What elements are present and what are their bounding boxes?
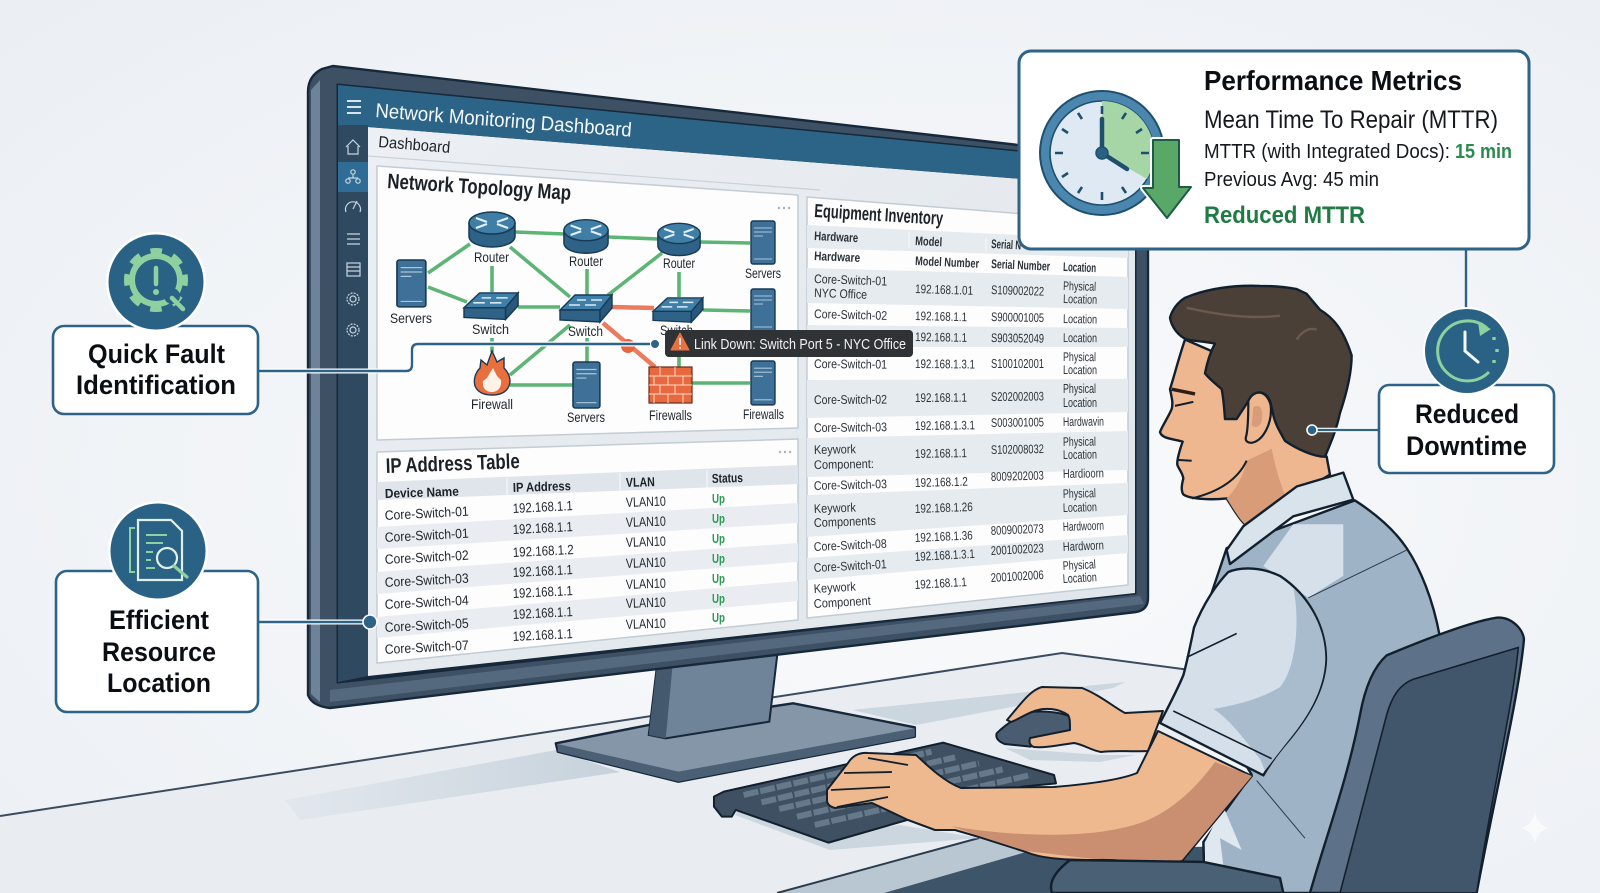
man: sleeve, head and chair <box>1051 286 1524 893</box>
device labels: Switch <box>660 322 693 338</box>
inventory column 1: Core-Switch-02 <box>814 393 887 407</box>
inventory column 4: Location <box>1063 260 1096 275</box>
inventory column 3: S202002003 <box>991 389 1044 404</box>
status column <box>712 492 725 625</box>
inventory column 4: Hardioorn <box>1063 466 1104 481</box>
inventory column 1: Keywork <box>813 580 857 596</box>
inventory column 3: S003001005 <box>991 415 1044 430</box>
inventory column 3: Serial Number <box>991 257 1051 274</box>
dashboard title: Network Monitoring Dashboard <box>375 100 633 142</box>
inventory column 4: Physical <box>1063 279 1096 294</box>
vlan column: VLAN10 <box>626 616 666 632</box>
inventory column 4: Physical <box>1063 350 1096 364</box>
green links <box>428 232 750 385</box>
forearm shading <box>951 762 1252 862</box>
inventory column 4: Location <box>1063 396 1097 410</box>
column headers <box>385 470 743 501</box>
inventory zebra rows <box>807 225 1128 580</box>
inventory column 2 <box>914 234 980 592</box>
inventory column 2: 192.168.1.1 <box>915 391 967 405</box>
device names: Core-Switch-01 <box>384 504 469 523</box>
panel: performance metrics <box>1019 51 1529 249</box>
vlan column: VLAN10 <box>626 555 666 571</box>
panel: ip address table <box>377 439 798 663</box>
vlan column: VLAN10 <box>626 494 666 510</box>
inventory column 3: 8009002073 <box>991 522 1044 538</box>
typing hand and forearm <box>827 731 1252 863</box>
icon: gear alert <box>106 232 206 332</box>
column headers: Device Name <box>385 484 459 501</box>
inventory column 1: Core-Switch-08 <box>814 537 887 554</box>
ip addresses: 192.168.1.1 <box>512 562 573 580</box>
monitor stand <box>556 655 915 782</box>
hair <box>1170 286 1352 457</box>
icon: clock with down arrow <box>1039 90 1191 218</box>
vlan column: VLAN10 <box>626 576 666 592</box>
inventory column 1: Component <box>813 594 872 611</box>
callout: quick fault identification <box>53 232 258 414</box>
callout text <box>102 605 216 698</box>
column headers: IP Address <box>513 478 571 495</box>
ip addresses <box>512 498 574 644</box>
inventory column 3: S903052049 <box>991 331 1044 346</box>
inventory column 2: 192.168.1.1 <box>915 446 967 461</box>
tooltip: link down alert: Link Down: Switch Port 5 - NYC Office <box>694 336 906 353</box>
status column: Up <box>712 572 725 586</box>
inventory column 1: Core-Switch-03 <box>814 420 887 435</box>
inventory column 1: Components <box>814 514 876 530</box>
inventory column 2: 192.168.1.2 <box>915 475 968 490</box>
device labels <box>390 249 784 425</box>
vlan column: VLAN10 <box>626 595 666 611</box>
device labels: Firewalls <box>743 406 784 422</box>
inventory column 4: Physical <box>1063 382 1096 396</box>
dashboard header bar <box>338 85 1135 188</box>
inventory column 1: Core-Switch-02 <box>814 307 887 323</box>
callout text: Efficient <box>109 605 209 635</box>
device labels: Firewall <box>471 396 513 412</box>
icon: warning triangle <box>671 333 689 350</box>
shirt sleeve <box>1160 568 1326 775</box>
finger lines <box>831 758 908 807</box>
status column: Up <box>712 592 725 606</box>
connector: reduced downtime <box>1307 425 1379 435</box>
icon: switches <box>464 293 703 322</box>
device labels: Servers <box>390 310 432 326</box>
ip addresses: 192.168.1.1 <box>512 626 573 644</box>
inventory column 3: S109002022 <box>991 283 1044 299</box>
breadcrumb: Dashboard <box>378 134 451 157</box>
status column: Up <box>712 611 725 625</box>
ear <box>1246 393 1271 443</box>
inventory column 4: Location <box>1063 312 1097 327</box>
inventory column 2: 192.168.1.26 <box>915 500 973 516</box>
icon: clock refresh <box>1423 307 1511 395</box>
icon: servers <box>397 221 775 408</box>
column headers: VLAN <box>626 474 655 490</box>
man: torso <box>1187 500 1440 893</box>
device labels: Router <box>474 249 509 265</box>
inventory column 3: S100102001 <box>991 357 1044 371</box>
inventory column 1: Core-Switch-01 <box>814 272 887 289</box>
inventory header separators <box>909 232 986 252</box>
inventory column 2: 192.168.1.1 <box>915 330 967 345</box>
inventory column 1 <box>813 229 887 611</box>
panel: network topology map <box>377 166 798 440</box>
inventory column 3 <box>990 237 1051 585</box>
result: reduced mttr: Reduced MTTR <box>1204 202 1365 229</box>
metric: current mttr: 15 min <box>1455 141 1512 163</box>
inventory column 4: Location <box>1063 292 1097 307</box>
status column: Up <box>712 552 725 566</box>
dashboard content background <box>368 127 1135 676</box>
icon: hamburger menu <box>347 101 361 113</box>
device names: Core-Switch-07 <box>384 638 469 657</box>
inventory column 2: 192.168.1.36 <box>915 528 973 545</box>
inventory column 4: Hardwoorn <box>1063 519 1104 534</box>
icon: routers <box>469 212 700 256</box>
icon: brick firewall <box>649 367 692 403</box>
status column: Up <box>712 512 725 526</box>
performance connector <box>1465 249 1467 309</box>
inventory column 1: Hardware <box>814 229 859 245</box>
vlan column: VLAN10 <box>626 534 666 550</box>
device names: Core-Switch-02 <box>384 548 469 567</box>
inventory column 4: Location <box>1063 448 1097 462</box>
callout text: Resource <box>102 637 216 667</box>
device labels: Servers <box>567 409 605 425</box>
inventory column 3: S102008032 <box>991 442 1044 457</box>
callout text: Location <box>107 668 211 698</box>
inventory column 3: Serial N <box>991 237 1022 252</box>
subtitle: mttr: Mean Time To Repair (MTTR) <box>1204 106 1498 134</box>
inventory column 2: 192.168.1.1 <box>915 309 967 324</box>
inventory column 3: S900001005 <box>991 310 1044 325</box>
ip addresses: 192.168.1.1 <box>512 498 573 516</box>
device names: Core-Switch-05 <box>384 616 469 635</box>
head and neck <box>1160 340 1330 524</box>
inventory column 1: Keywork <box>814 501 857 516</box>
inventory column 2: 192.168.1.1 <box>914 575 967 592</box>
icon: firewall flame <box>474 351 510 395</box>
icon: document search <box>108 501 208 601</box>
chair armrest <box>1051 860 1283 893</box>
callout: reduced downtime <box>1379 307 1554 473</box>
vlan column <box>626 494 666 632</box>
inventory column 2: 192.168.1.3.1 <box>915 357 975 372</box>
screen <box>338 85 1135 682</box>
inventory column 4: Physical <box>1062 557 1096 573</box>
inventory column 1: NYC Office <box>814 286 867 302</box>
inventory column 4: Location <box>1062 570 1097 586</box>
heading: topology: Network Topology Map <box>387 170 572 205</box>
monitor bezel <box>308 66 1148 708</box>
vlan column: VLAN10 <box>626 514 666 530</box>
inventory column 2: 192.168.1.3.1 <box>914 547 975 564</box>
sidebar icons <box>346 140 360 336</box>
connector: efficient resource location <box>258 615 377 629</box>
menu dots <box>779 451 791 453</box>
mouse hand and arm <box>1007 687 1163 752</box>
inventory column 1: Component: <box>814 457 874 472</box>
inventory column 1: Hardware <box>814 249 860 265</box>
callout: efficient resource location <box>56 501 258 712</box>
device labels: Firewalls <box>649 407 692 423</box>
mouse <box>996 712 1072 747</box>
inventory column 2: Model <box>915 234 943 249</box>
callout text: Reduced <box>1415 399 1519 429</box>
inventory column 3: 2001002006 <box>990 568 1044 585</box>
device labels: Router <box>569 253 603 269</box>
inventory column 3: 8009202003 <box>991 469 1044 484</box>
heading: ip table: IP Address Table <box>385 450 520 478</box>
ip addresses: 192.168.1.1 <box>512 519 573 537</box>
device labels: Router <box>663 255 695 271</box>
keyboard <box>714 743 1056 843</box>
column headers: Status <box>712 470 743 486</box>
callout text: Quick Fault <box>88 339 225 369</box>
status column: Up <box>712 532 725 546</box>
shirt collar <box>1227 473 1353 564</box>
inventory column 1: Core-Switch-01 <box>814 357 887 372</box>
office chair <box>1310 618 1524 893</box>
heading: performance metrics: Performance Metrics <box>1204 65 1462 96</box>
failed red links <box>603 307 655 367</box>
device labels: Switch <box>568 323 603 339</box>
ip addresses: 192.168.1.1 <box>512 583 573 601</box>
inventory column 2: 192.168.1.01 <box>915 282 973 298</box>
device names: Core-Switch-03 <box>384 571 469 590</box>
connector: quick fault to link-down dot <box>258 340 660 371</box>
tooltip: link down alert <box>665 330 913 357</box>
inventory column 4: Location <box>1063 500 1097 515</box>
inventory column 2: 192.168.1.3.1 <box>915 418 975 433</box>
man: arms and hands <box>827 687 1252 863</box>
inventory column 4: Hardwavin <box>1063 415 1104 429</box>
ip addresses: 192.168.1.2 <box>512 542 574 560</box>
inventory column 4: Physical <box>1063 435 1096 449</box>
inventory column 4: Physical <box>1063 486 1096 501</box>
device labels: Servers <box>745 265 781 281</box>
callout text <box>1406 399 1527 461</box>
device labels: Switch <box>472 321 509 337</box>
keyboard and mouse <box>714 712 1072 843</box>
heading: equipment inventory: Equipment Inventory <box>814 201 944 230</box>
panel: equipment inventory <box>807 197 1128 618</box>
device names <box>384 504 469 657</box>
inventory column 4 <box>1062 260 1104 586</box>
inventory column 1: Keywork <box>814 442 857 457</box>
inventory column 4: Location <box>1063 331 1097 345</box>
inventory column 2: Model Number <box>915 254 980 271</box>
callout text <box>76 339 236 400</box>
inventory column 3: 2001002023 <box>990 541 1044 558</box>
inventory column 4: Hardworn <box>1063 538 1104 554</box>
table header band <box>377 465 798 500</box>
inventory column 1: Core-Switch-01 <box>813 557 887 575</box>
metric: previous average: Previous Avg: 45 min <box>1204 169 1379 191</box>
zebra rows <box>377 503 798 638</box>
sidebar <box>338 101 368 682</box>
inventory column 4: Location <box>1063 363 1097 377</box>
callout text: Downtime <box>1406 431 1527 461</box>
metric: current mttr: MTTR (with Integrated Docs): <box>1204 141 1450 163</box>
inventory column 1: Core-Switch-03 <box>814 477 887 493</box>
sparkle watermark <box>1521 813 1549 843</box>
ip addresses: 192.168.1.1 <box>512 604 573 622</box>
device names: Core-Switch-04 <box>384 593 469 612</box>
desk <box>0 653 1260 893</box>
status column: Up <box>712 492 725 506</box>
device names: Core-Switch-01 <box>384 526 469 545</box>
menu dots <box>778 207 790 209</box>
callout text: Identification <box>76 370 236 400</box>
